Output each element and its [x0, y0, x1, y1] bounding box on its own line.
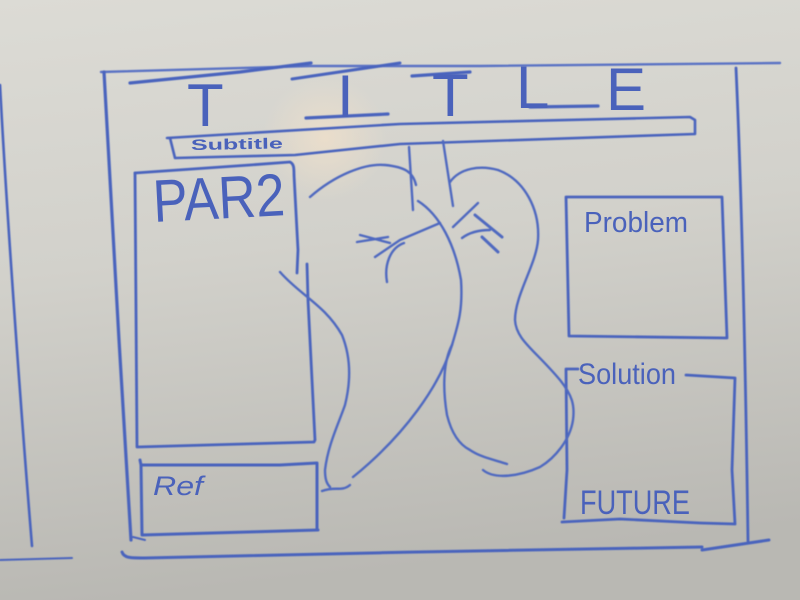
title pen lines	[306, 72, 598, 118]
title: TITLE	[187, 54, 646, 139]
board edge at left	[0, 85, 72, 560]
illustration: lungs and airways	[280, 141, 574, 491]
panel: Solution and Future	[562, 369, 735, 524]
subtitle bar	[167, 117, 695, 158]
poster outer frame	[101, 63, 780, 558]
heading: FUTURE: FUTURE	[580, 484, 690, 522]
heading: PAR2: PAR2	[151, 161, 286, 235]
heading: Solution: Solution	[578, 358, 676, 391]
panel: Problem	[566, 197, 727, 338]
subtitle: Subtitle	[191, 135, 283, 154]
heading: Problem: Problem	[584, 207, 688, 239]
panel: Ref	[140, 460, 318, 535]
panel: PAR2	[135, 162, 315, 447]
heading: Ref: Ref	[153, 471, 206, 501]
